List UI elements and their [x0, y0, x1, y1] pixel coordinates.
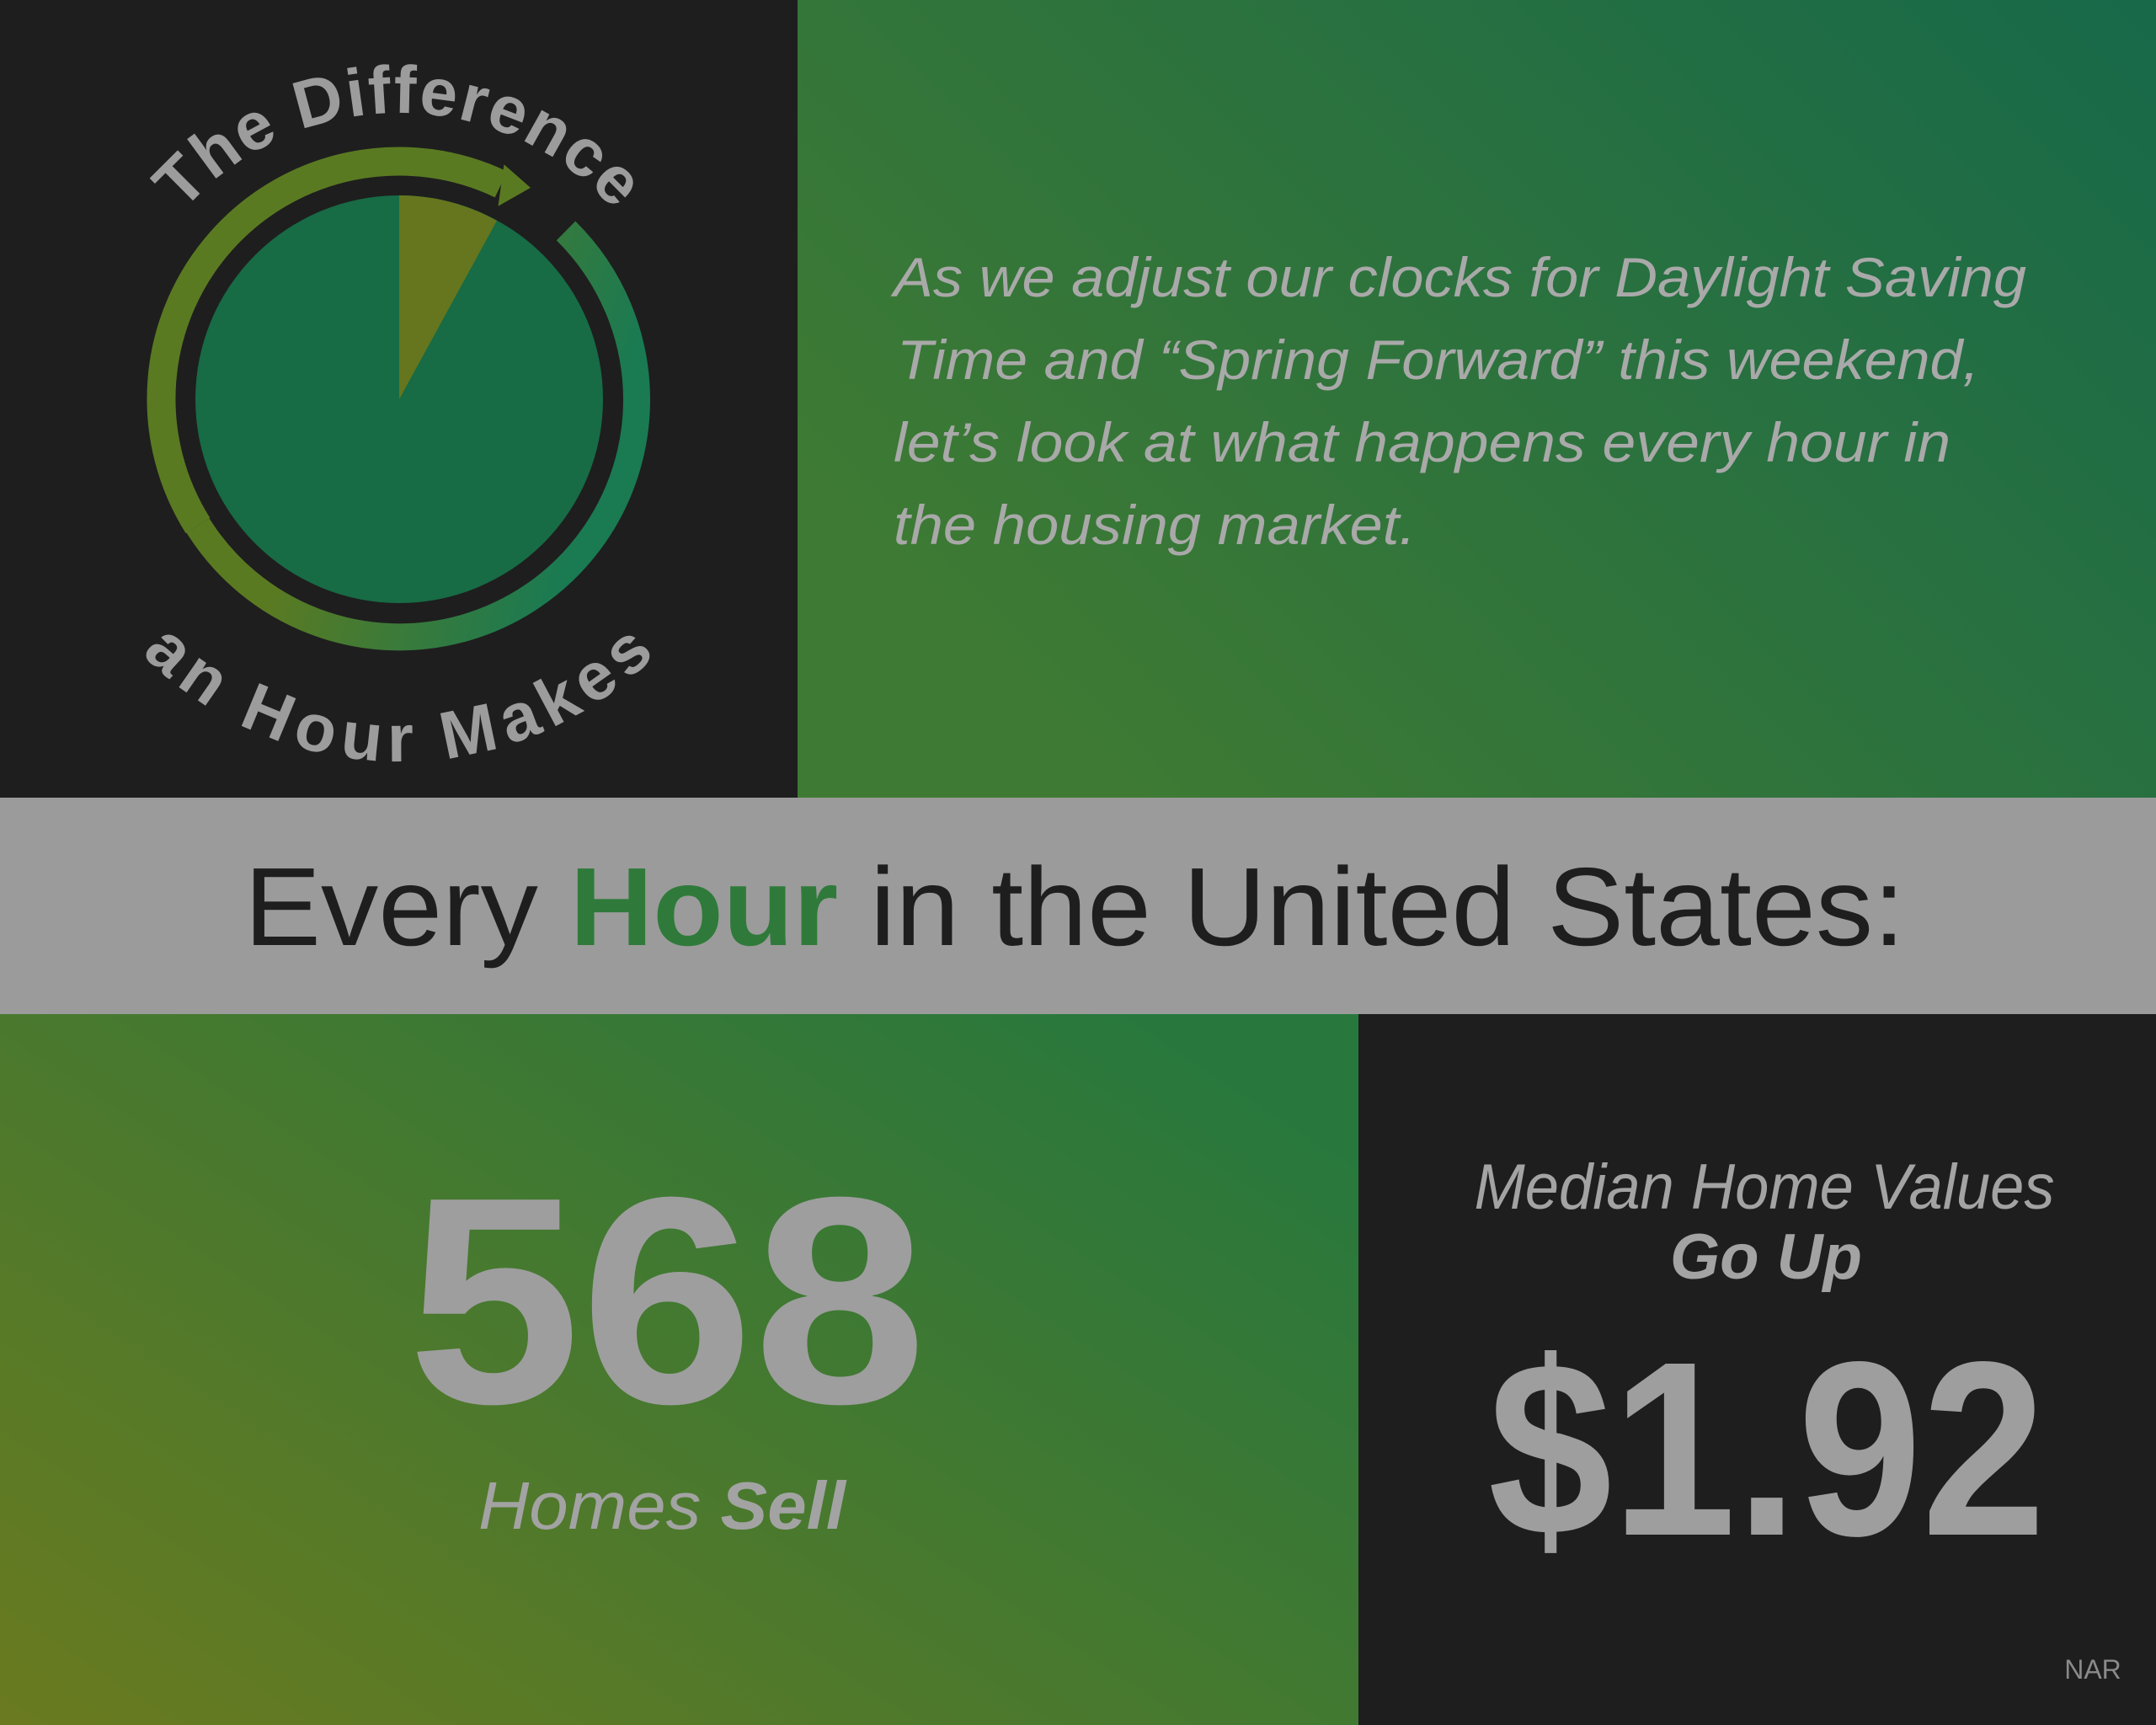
- panel: intro background: [798, 0, 2156, 798]
- heading: Every Hour in the United States:: [244, 845, 1905, 969]
- text block: intro paragraph: the housing market.: [894, 494, 1416, 556]
- label: median home values: Median Home Values: [1474, 1151, 2055, 1223]
- stat: $1.92: $1.92: [1488, 1310, 2046, 1588]
- icon: olive ring arc with arrow: [161, 161, 501, 526]
- logo text top: The Difference: [150, 64, 633, 204]
- icon: ring arc lower: [198, 231, 637, 637]
- label: homes sell: Homes Sell: [478, 1468, 847, 1543]
- text block: intro paragraph: let’s look at what happens every hour in: [894, 411, 1951, 473]
- panel: homes sell: [0, 1014, 1358, 1725]
- band: heading background: [0, 798, 2156, 1014]
- stat: 568: 568: [408, 1136, 926, 1466]
- logo: clock: [147, 64, 650, 761]
- text block: intro paragraph: Time and “Spring Forward” this weekend,: [897, 328, 1979, 391]
- text block: intro paragraph: [890, 246, 2026, 556]
- text block: intro paragraph: As we adjust our clocks for Daylight Saving: [890, 246, 2026, 308]
- logo text bottom: an Hour Makes: [147, 635, 650, 761]
- source: NAR: NAR: [2064, 1654, 2121, 1685]
- panel: home values: [1358, 1014, 2156, 1725]
- icon: hour wedge: [399, 195, 497, 399]
- icon: clock face: [195, 195, 603, 603]
- panel: logo background: [0, 0, 798, 798]
- label: go up: Go Up: [1670, 1221, 1862, 1293]
